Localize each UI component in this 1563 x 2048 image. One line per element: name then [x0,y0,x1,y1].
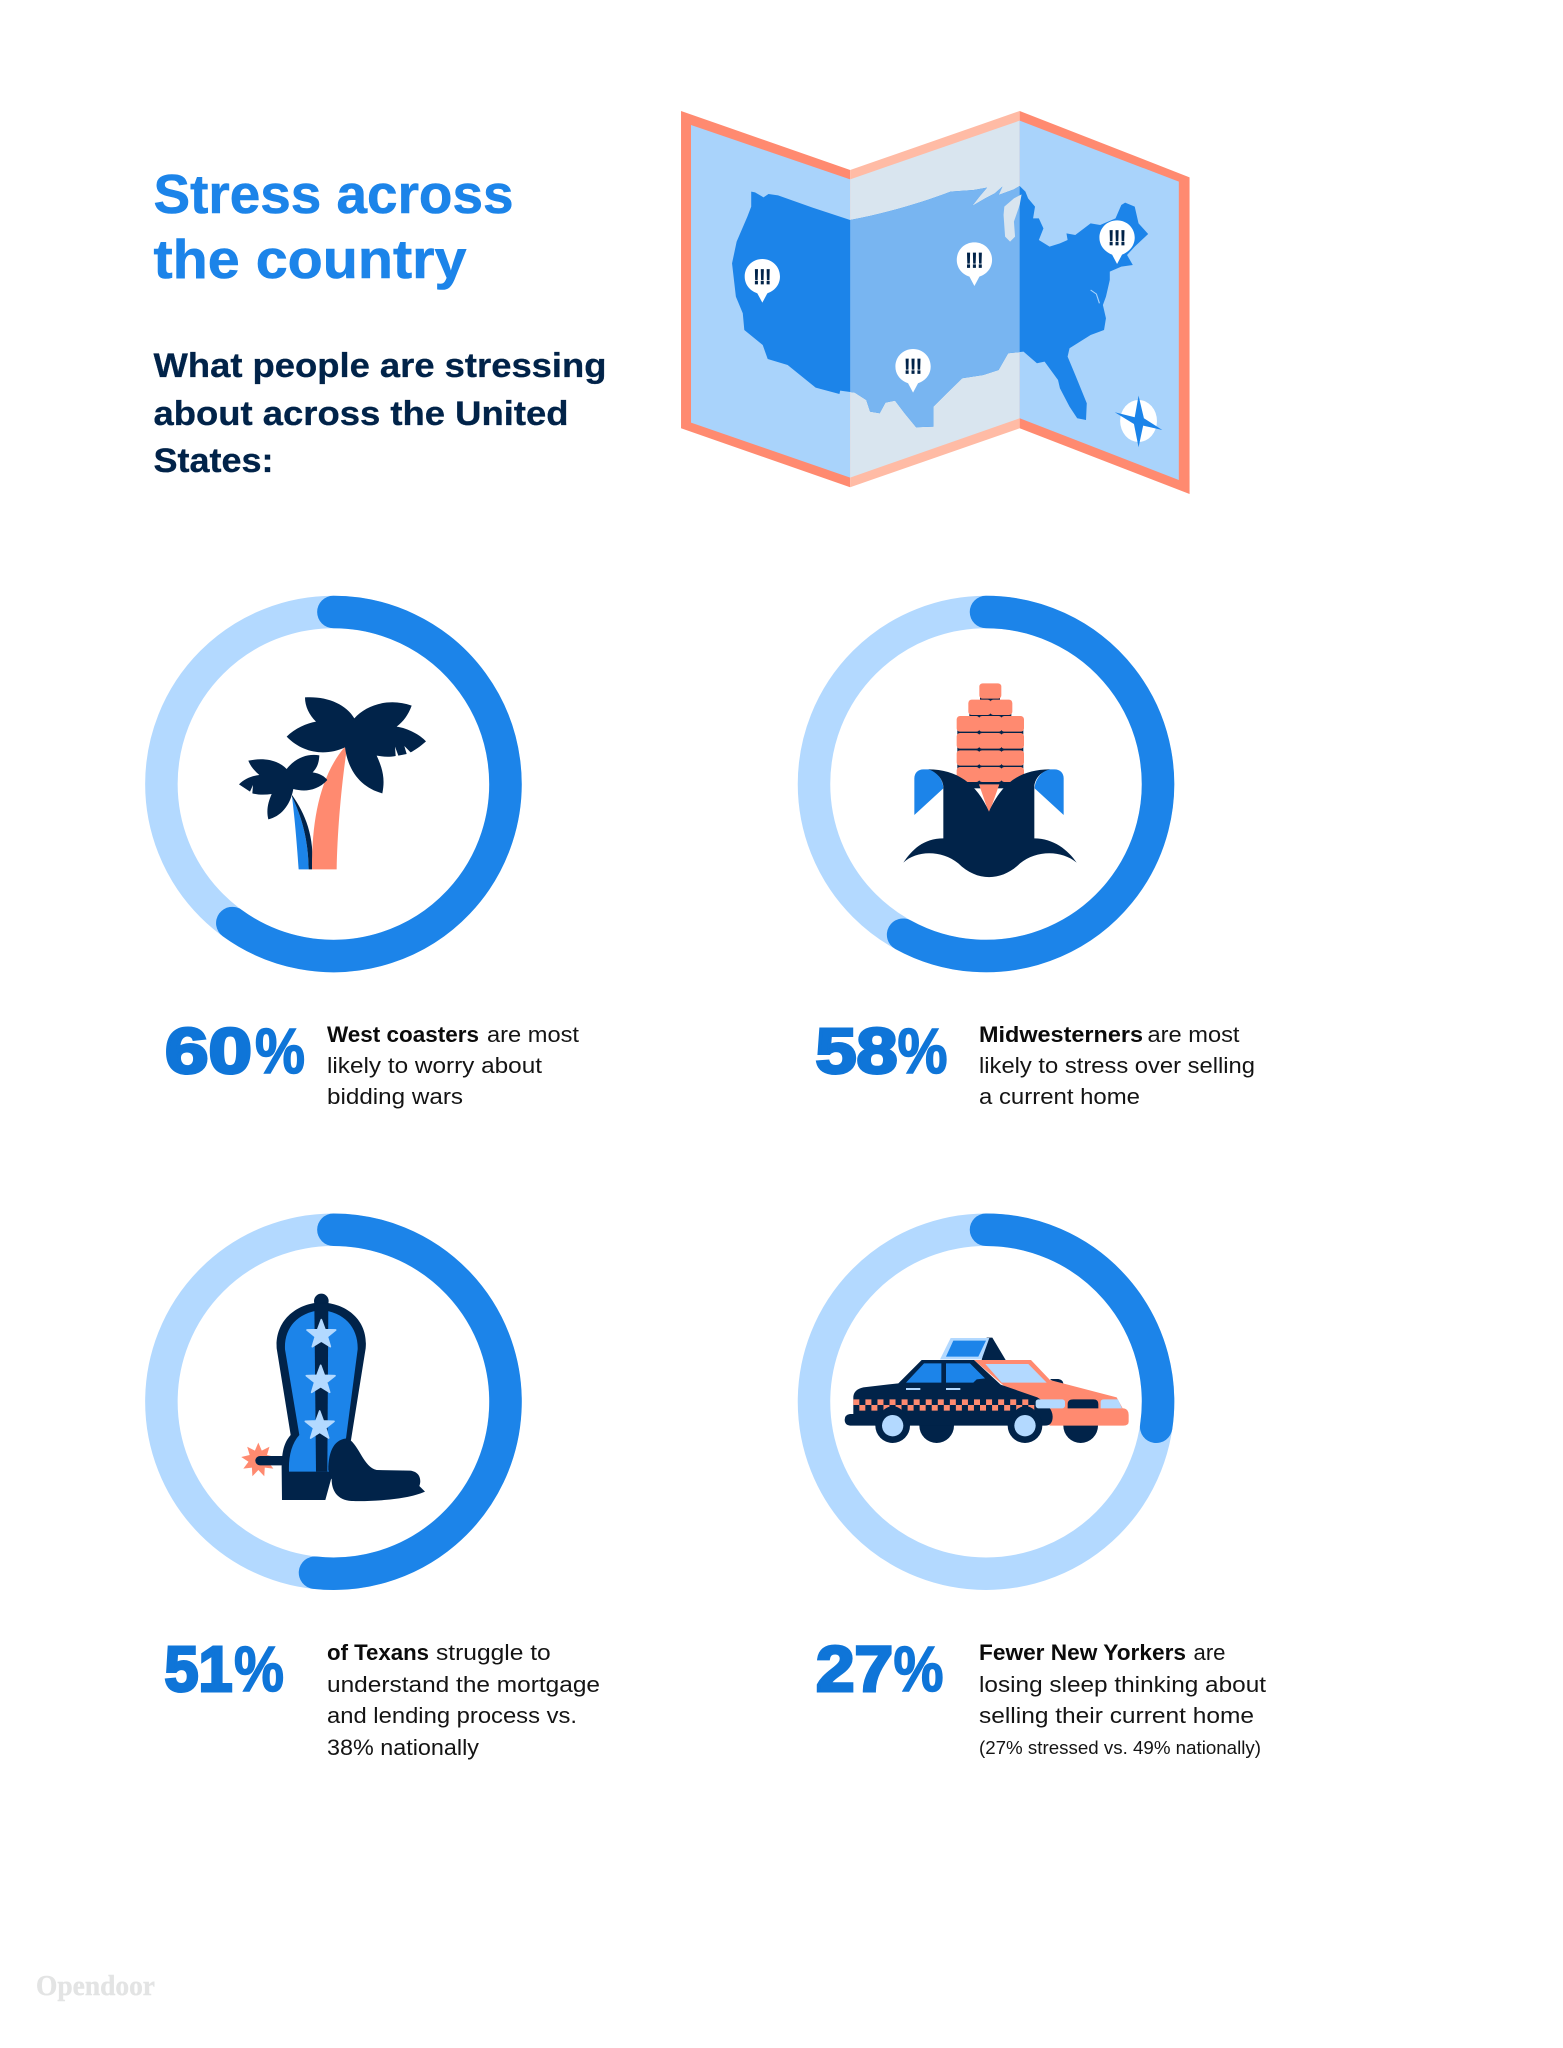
icon: cowboy boot [241,1294,425,1501]
panel: texas [161,1230,600,1760]
pin: midwest: !!! [966,248,983,272]
subtitle: States: [154,442,274,480]
donut chart 27% [814,1230,1158,1574]
pin: texas [895,349,931,393]
folded map illustration [681,111,1190,494]
stat: 60%: 60 [165,1015,252,1087]
description: midwesterners [979,1022,1255,1109]
description: west coasters: are most [487,1022,579,1047]
description: new yorkers: selling their current home [979,1703,1254,1728]
pin: new york: !!! [1108,226,1126,250]
pin: new york [1099,220,1135,264]
title: Stress across [154,163,514,225]
subtitle: What people are stressing [154,347,606,385]
icon: palm trees [239,697,426,869]
donut chart 51% [161,1230,506,1574]
description: new yorkers: Fewer New Yorkers [979,1640,1186,1665]
icon: taxi [845,1338,1129,1443]
donut chart 60% [161,612,505,956]
icon: corn [903,683,1077,877]
description: west coasters: likely to worry about [327,1053,542,1078]
stat: 27% [816,1633,944,1705]
panel: west coast [161,612,579,1109]
stat: 58% [816,1015,948,1087]
description: west coasters: bidding wars [327,1084,463,1109]
title: the country [154,228,467,290]
logo: Opendoor: Opendoor [36,1970,155,2002]
stat: 58%: % [898,1015,948,1087]
description: texans: of Texans [327,1640,429,1665]
icon: spur [241,1443,283,1476]
description: texans: struggle to [436,1640,551,1665]
description: midwesterners: likely to stress over selling [979,1053,1255,1078]
pin: texas: !!! [904,354,922,378]
subtitle [154,347,606,480]
description: new yorkers: losing sleep thinking about [979,1672,1266,1697]
description: new yorkers [979,1640,1266,1758]
map frame [681,111,1190,494]
stat: 58%: 58 [816,1015,898,1087]
panel: midwest [814,612,1255,1109]
title [154,163,514,290]
description: new yorkers: (27% stressed vs. 49% nationally) [979,1738,1261,1758]
stat: 51%: 51 [164,1633,232,1705]
description: new yorkers: are [1194,1640,1226,1665]
pin: west [745,259,780,303]
donut chart 58% [814,612,1158,956]
description: midwesterners: are most [1148,1022,1240,1047]
stat: 51% [164,1633,284,1705]
panel: new york [814,1230,1266,1758]
map panels [691,121,1179,480]
description: midwesterners: Midwesterners [979,1022,1143,1047]
description: texans: and lending process vs. [327,1703,577,1728]
description: texans: 38% nationally [327,1735,479,1760]
icon: compass [1115,396,1162,447]
pin: midwest [957,242,992,286]
description: texans: understand the mortgage [327,1672,600,1697]
pin: west: !!! [754,264,771,289]
description: midwesterners: a current home [979,1084,1140,1109]
stat: 51%: % [234,1633,284,1705]
description: west coasters [327,1022,579,1109]
stat: 60%: % [255,1015,305,1087]
stat: 60% [165,1015,305,1087]
USA silhouette [732,186,1148,427]
subtitle: about across the United [154,395,568,433]
description: texans [327,1640,600,1760]
stat: 27%: 27 [816,1633,893,1705]
stat: 27%: % [894,1633,944,1705]
description: west coasters: West coasters [327,1022,479,1047]
